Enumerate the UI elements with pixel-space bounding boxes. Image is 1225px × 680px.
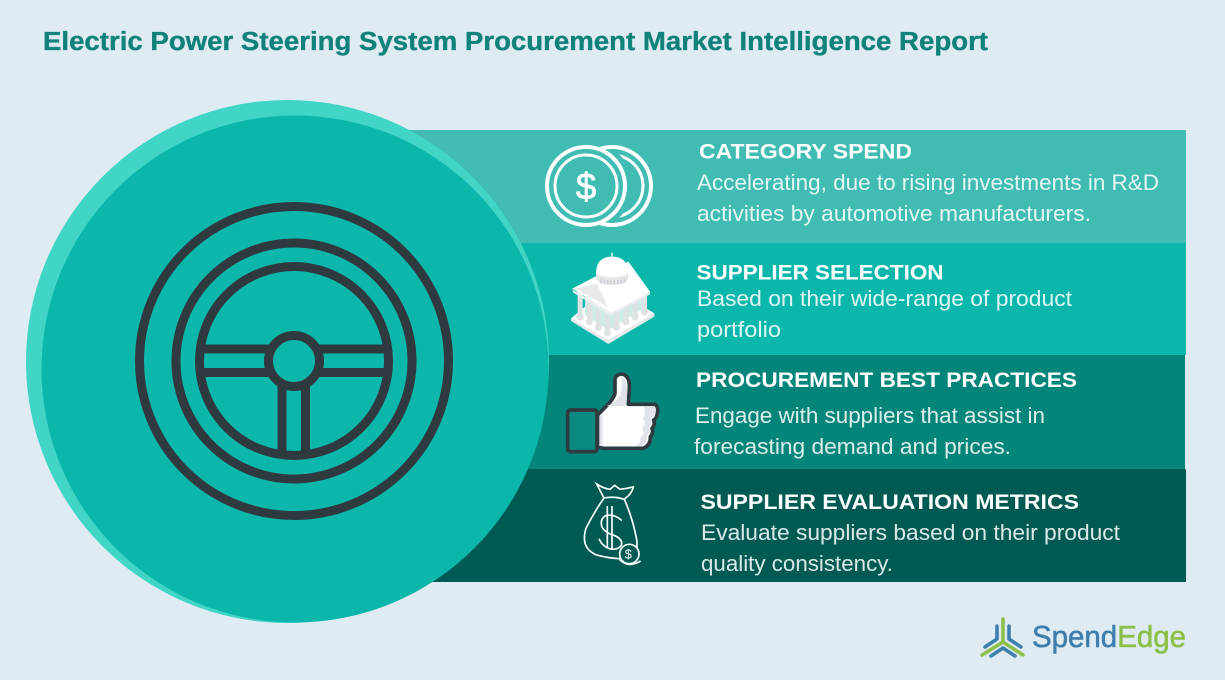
icon: money bag <box>584 484 640 564</box>
icon: money bag: $ <box>625 548 632 562</box>
icon: thumbs up <box>568 374 658 452</box>
text: supplier evaluation metrics description <box>701 520 1121 576</box>
text: procurement best practices description <box>694 403 1045 459</box>
logo wordmark: SpendEdge <box>1032 619 1186 654</box>
text: supplier selection description <box>697 286 1073 342</box>
heading: category spend: CATEGORY SPEND <box>699 140 912 164</box>
icon: steering wheel <box>140 206 448 516</box>
text: category spend description <box>697 170 1159 226</box>
text: procurement best practices description: Engage with suppliers that assist in <box>695 403 1045 428</box>
heading: procurement best practices: PROCUREMENT BEST PRACTICES <box>696 369 1077 392</box>
logo mark <box>982 619 1023 656</box>
title: Electric Power Steering System Procurement Market Intelligence Report <box>43 28 989 56</box>
heading: supplier selection: SUPPLIER SELECTION <box>696 262 944 284</box>
text: supplier selection description: portfolio <box>697 317 781 342</box>
icon: dollar coins <box>540 140 651 232</box>
text: procurement best practices description: forecasting demand and prices. <box>694 434 1011 459</box>
logo: SpendEdge <box>982 619 1186 656</box>
icon: dollar coins: $ <box>576 166 596 207</box>
text: category spend description: activities by automotive manufacturers. <box>697 201 1091 226</box>
text: supplier evaluation metrics description: quality consistency. <box>701 551 893 576</box>
heading: supplier evaluation metrics: SUPPLIER EVALUATION METRICS <box>700 491 1079 514</box>
icon: bank building <box>571 253 654 344</box>
panel: category spend <box>400 130 1186 243</box>
panel: supplier selection <box>400 243 1186 355</box>
text: category spend description: Accelerating, due to rising investments in R&D <box>697 170 1159 195</box>
text: supplier selection description: Based on their wide-range of product <box>697 286 1073 311</box>
panel: supplier evaluation metrics <box>400 469 1186 582</box>
text: supplier evaluation metrics description: Evaluate suppliers based on their product <box>701 520 1121 545</box>
panel: procurement best practices <box>400 355 1185 469</box>
large circle with steering wheel <box>26 100 549 623</box>
